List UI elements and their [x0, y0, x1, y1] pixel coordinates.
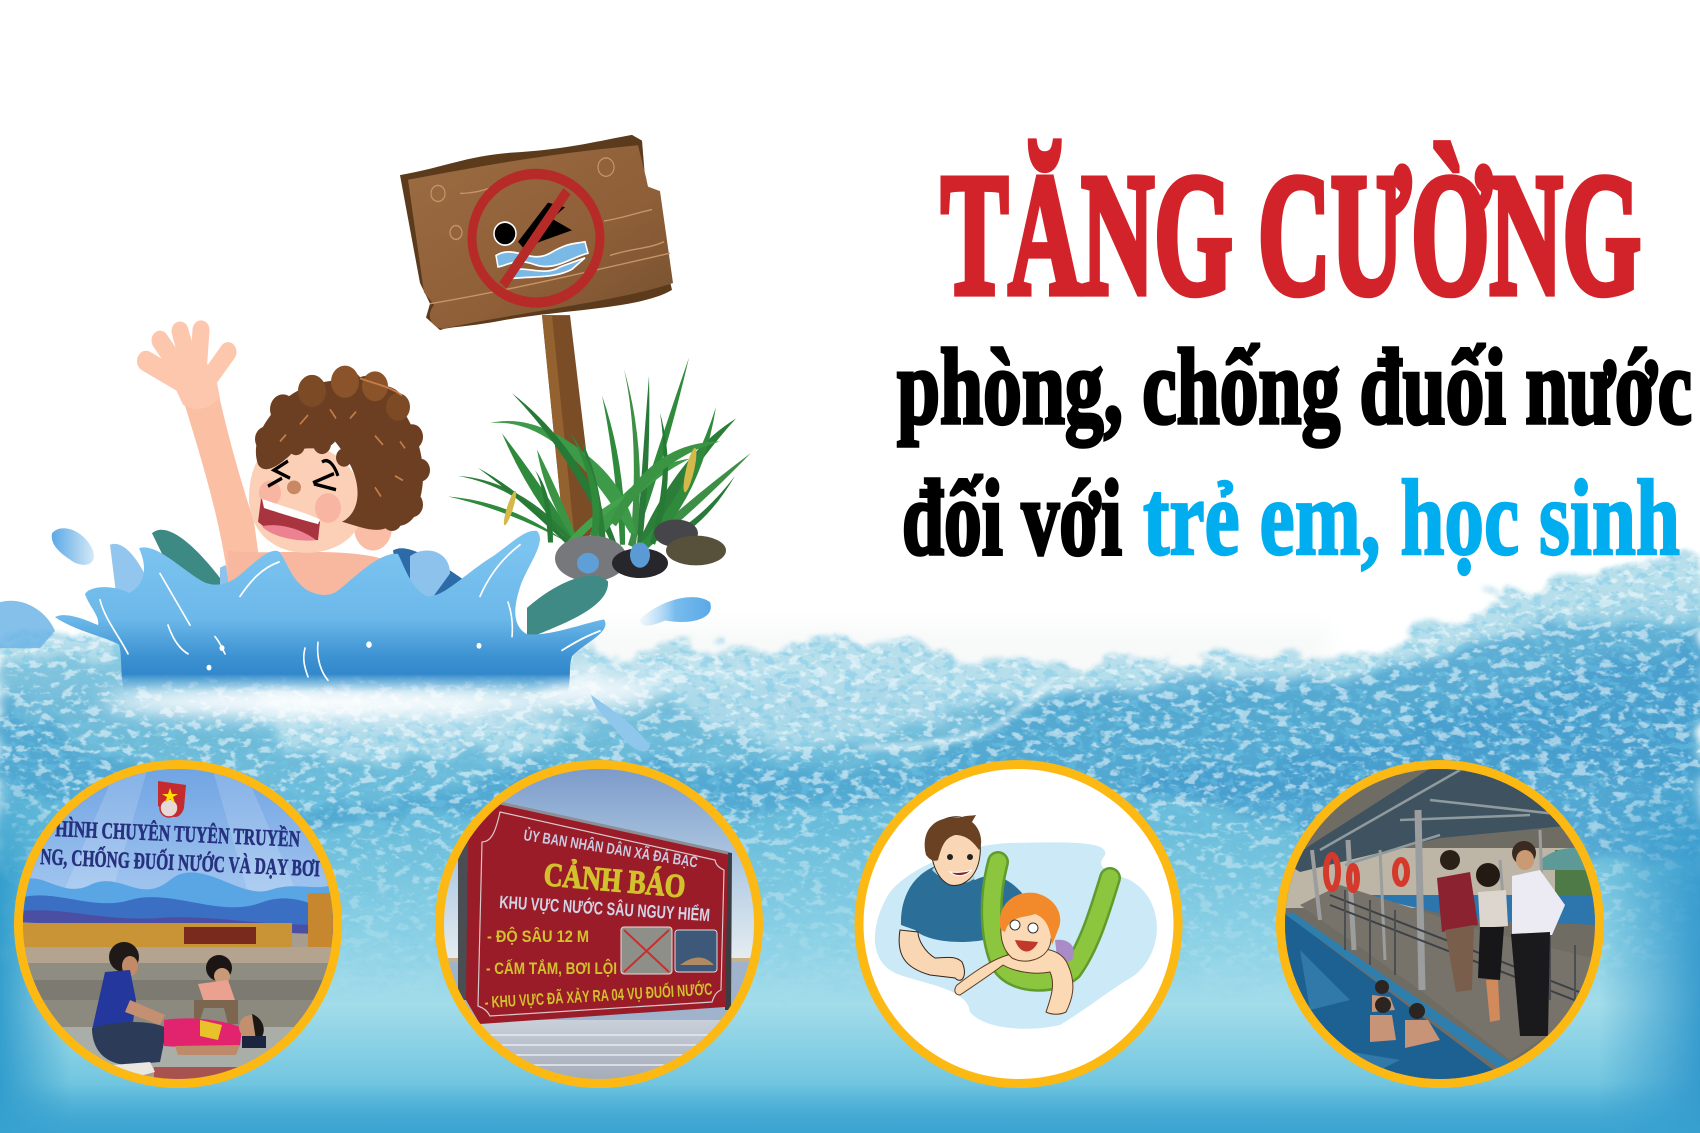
splash back shapes	[110, 530, 608, 639]
warning board: KHU VỰC NƯỚC SÂU NGUY HIỂM	[499, 891, 711, 925]
lying child	[164, 1014, 266, 1055]
subtitle line 2: đối với	[902, 459, 1122, 578]
girl	[194, 955, 238, 1024]
roof	[1295, 769, 1560, 872]
warning board: ỦY BAN NHÂN DÂN XÃ ĐÁ BẠC	[522, 826, 699, 871]
warning board: - ĐỘ SÂU 12 M	[487, 927, 589, 946]
banner	[23, 769, 333, 935]
water droplets	[0, 528, 711, 648]
officials	[1437, 841, 1565, 1036]
subtitle line 2	[902, 459, 1680, 578]
photo circle 3: swimming lesson illustration	[854, 760, 1182, 1088]
wooden warning sign	[400, 135, 673, 330]
photo circle 2: warning sign	[435, 760, 763, 1090]
child	[955, 893, 1074, 1014]
warning board: CẢNH BÁO	[542, 855, 687, 905]
poles and fence	[1312, 810, 1542, 990]
arm and hand	[146, 330, 262, 579]
grass	[448, 358, 751, 554]
water background	[0, 540, 1700, 1133]
icon: no swimming	[472, 174, 600, 303]
hair	[255, 366, 430, 531]
drowning boy	[146, 330, 430, 614]
water splash	[55, 531, 605, 711]
warning board: - CẤM TẮM, BƠI LỘI	[486, 959, 617, 978]
pool noodle	[992, 862, 1110, 981]
warning board: - KHU VỰC ĐÃ XẢY RA 04 VỤ ĐUỐI NƯỚC	[484, 979, 713, 1012]
banner: HÌNH CHUYÊN TUYÊN TRUYỀN	[55, 815, 301, 852]
sign post	[542, 315, 596, 545]
photo circle 1: first aid training	[14, 760, 344, 1090]
banner: NG, CHỐNG ĐUỐI NƯỚC VÀ DẠY BƠI	[40, 843, 321, 881]
warning board	[466, 802, 728, 1024]
man	[899, 815, 1022, 980]
rescuer	[92, 942, 167, 1080]
face	[249, 444, 363, 553]
falling drop	[591, 695, 650, 752]
stones	[555, 520, 726, 581]
pool	[1360, 895, 1600, 925]
children in pool	[1370, 980, 1440, 1048]
foam under splash	[100, 670, 660, 718]
photo circle 4: swimming pool inspection	[1276, 760, 1604, 1095]
